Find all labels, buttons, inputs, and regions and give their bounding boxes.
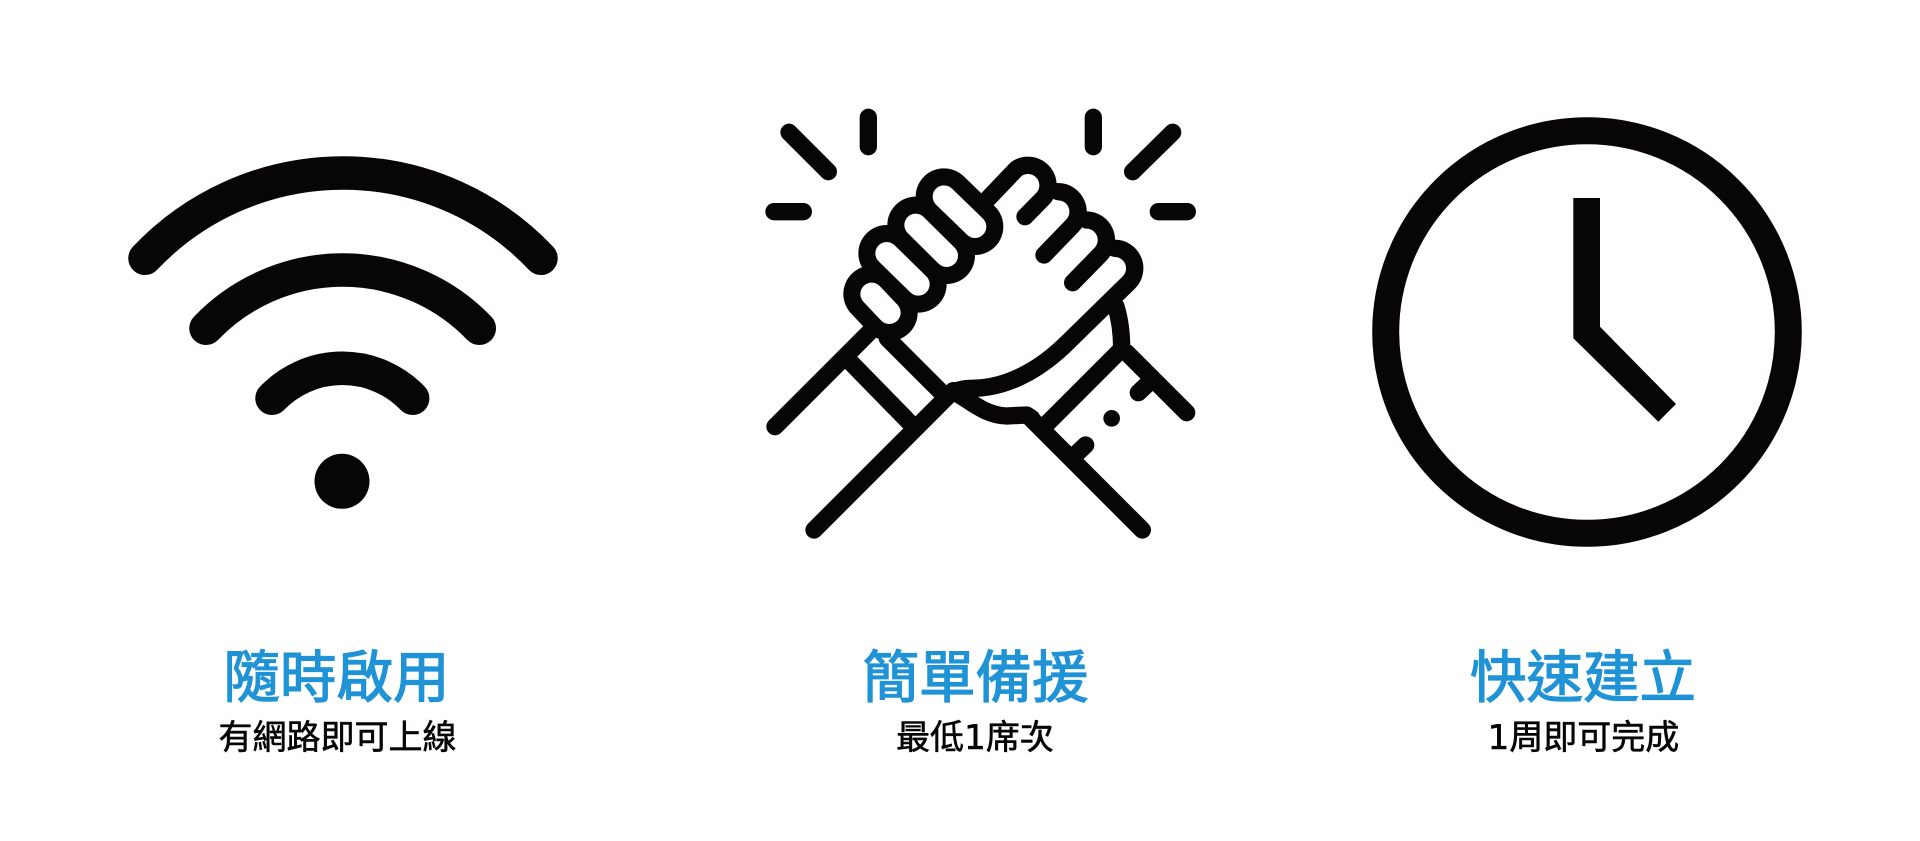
text: one week: 1周即可完成 <box>1488 718 1679 758</box>
text: online access: 有網路即可上線 <box>218 719 456 757</box>
icon: clasped hands <box>774 117 1187 530</box>
heading: simple backup: 簡單備援 <box>862 646 1088 709</box>
panel: simple backup <box>774 117 1187 758</box>
heading: quick setup: 快速建立 <box>1470 646 1696 709</box>
panel: always available <box>145 173 541 757</box>
heading: always available: 隨時啟用 <box>224 646 450 709</box>
text: minimum seats: 最低1席次 <box>896 718 1054 758</box>
panel: quick setup <box>1386 131 1788 758</box>
icon: wifi <box>145 173 541 509</box>
icon: clock <box>1386 131 1788 533</box>
